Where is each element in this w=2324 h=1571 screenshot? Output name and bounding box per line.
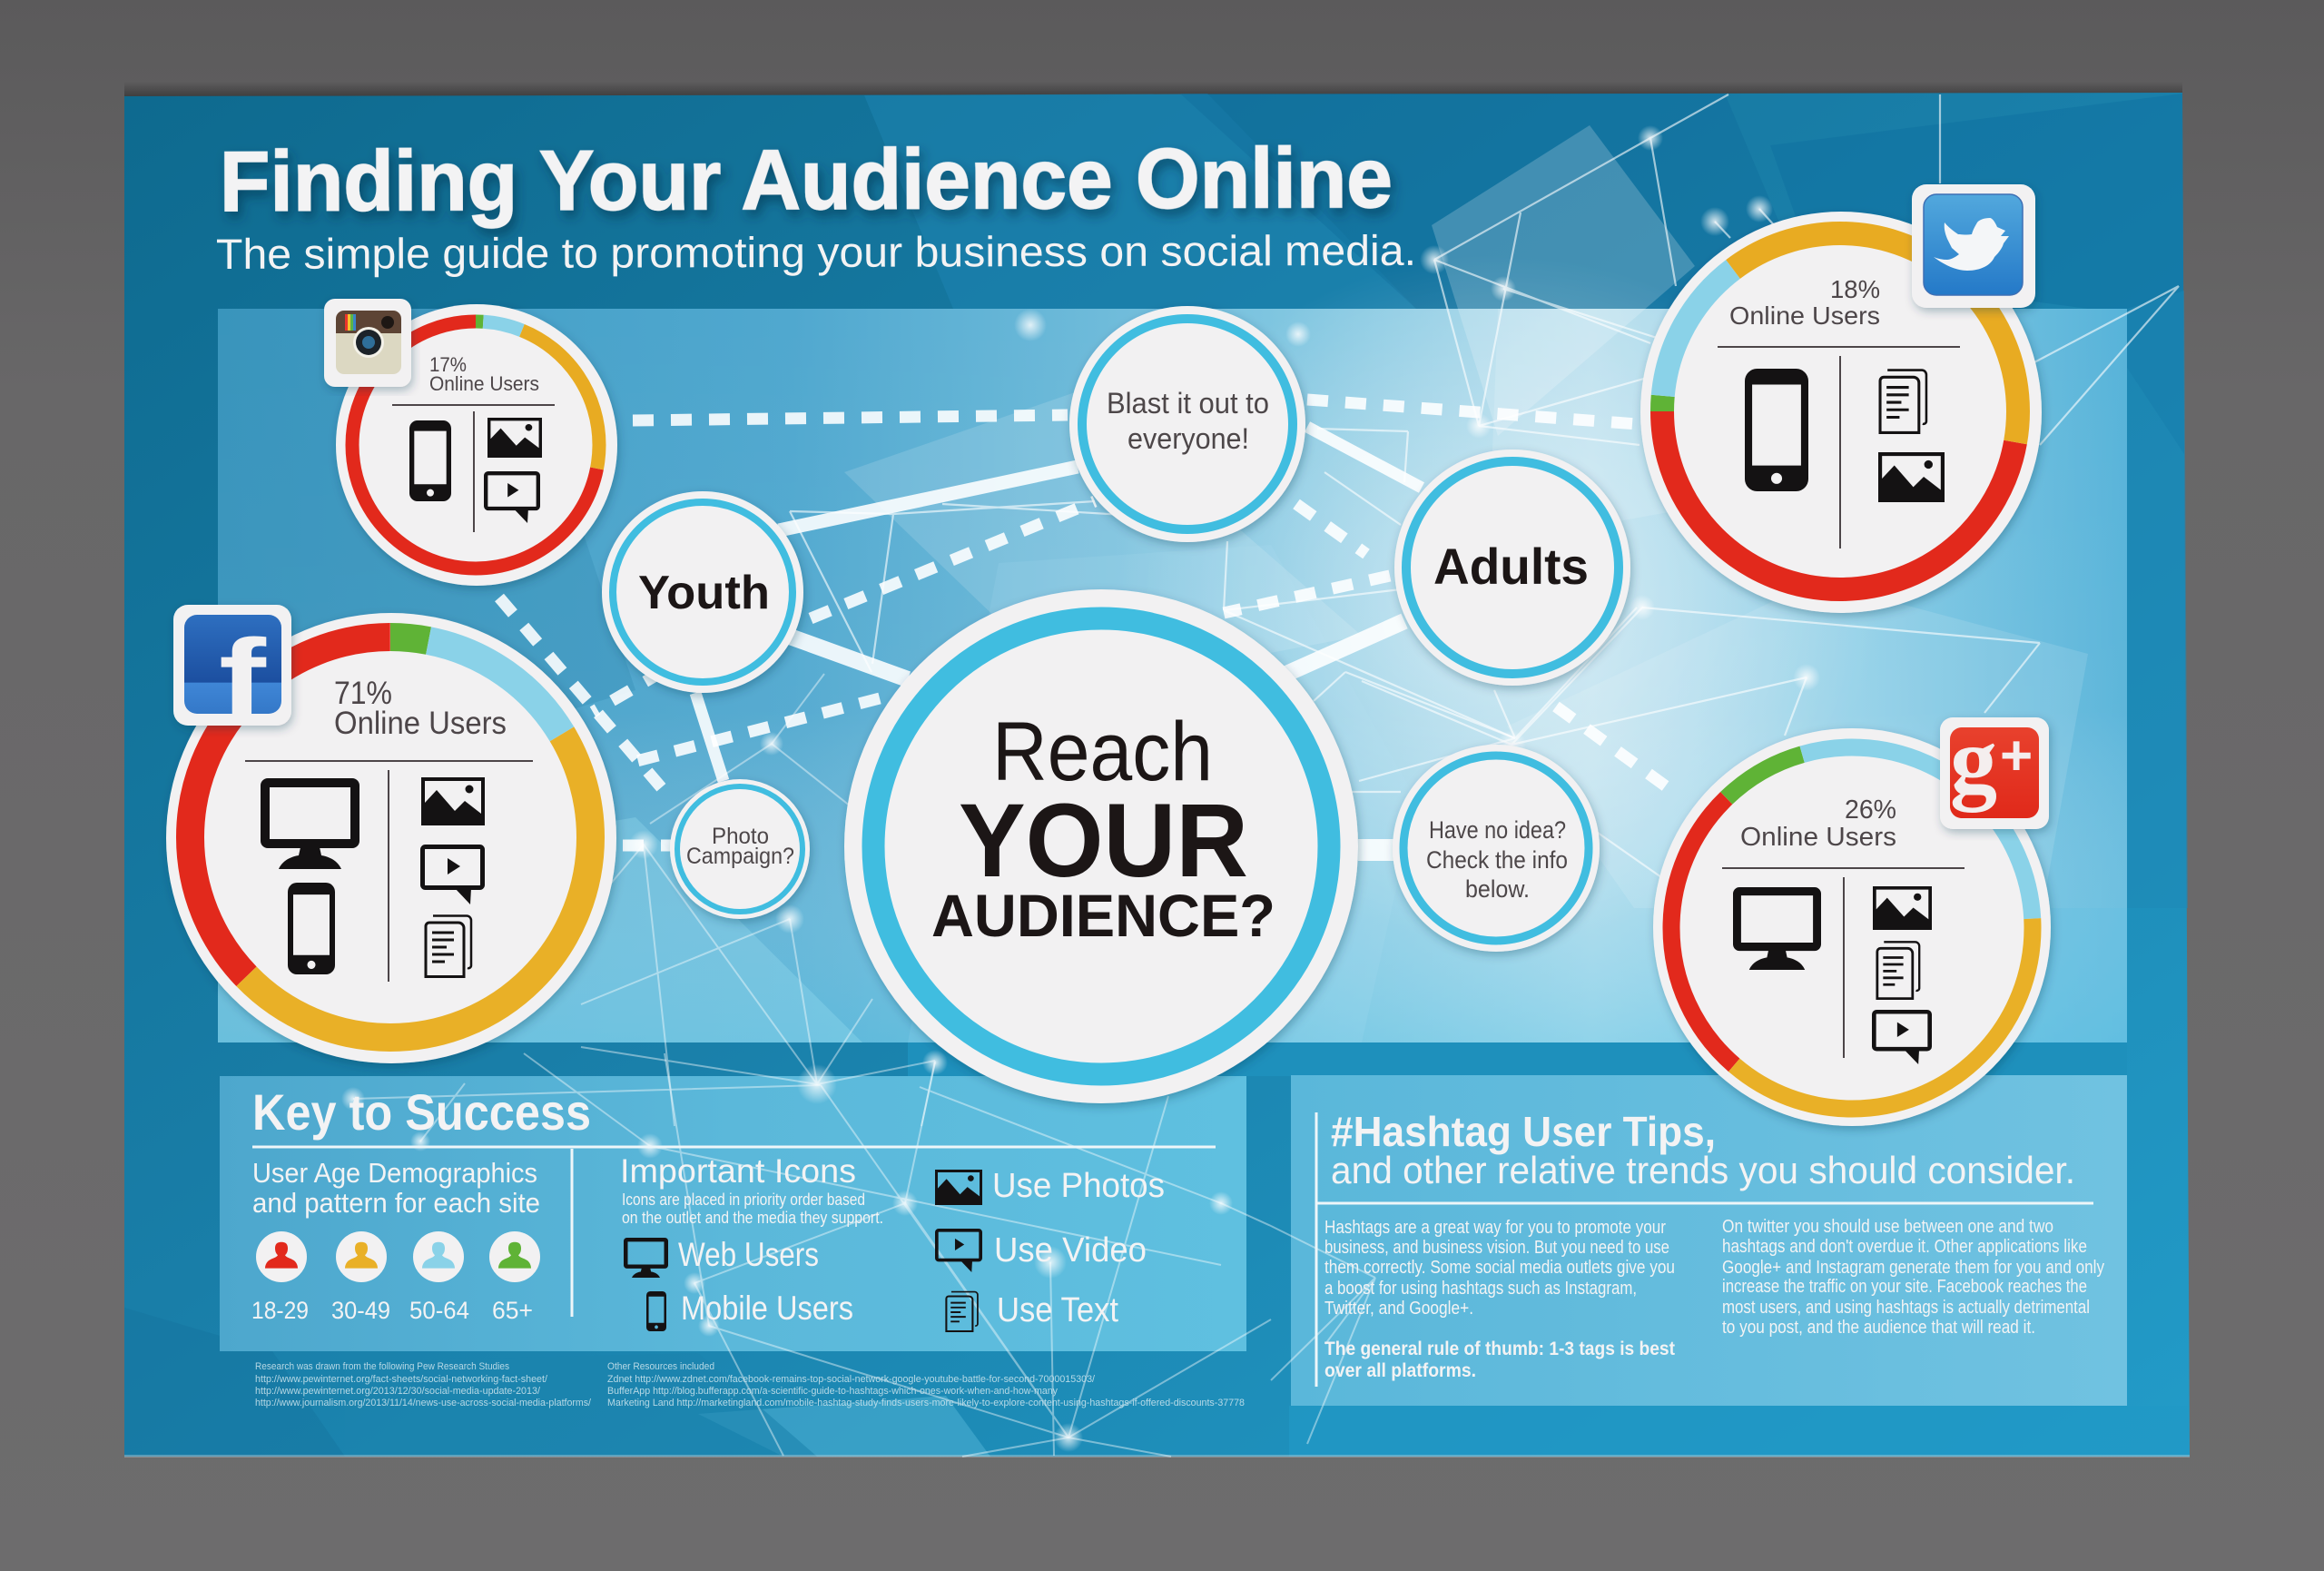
legend: age labels: 30-49 xyxy=(331,1297,390,1324)
icon: photos xyxy=(1878,452,1945,502)
facebook stat: Online Users xyxy=(334,706,507,741)
badge: Twitter xyxy=(1912,184,2035,308)
callout: rule of thumb: over all platforms. xyxy=(1324,1360,1476,1381)
text: right column: hashtags and don't overdue it. Other applications like xyxy=(1722,1237,2087,1257)
icon: photos xyxy=(1873,886,1932,930)
network mesh lines: upper xyxy=(790,94,2179,890)
key: use photos: Use Photos xyxy=(992,1167,1165,1205)
text: research sources: Other Resources included xyxy=(607,1361,714,1372)
text: right column: On twitter you should use between one and two xyxy=(1722,1217,2053,1237)
icon: video xyxy=(486,473,538,523)
bubble: Blast it out to everyone: Blast it out to xyxy=(1107,387,1269,420)
bubble: Photo Campaign: Photo xyxy=(712,824,769,849)
callout: rule of thumb xyxy=(1324,1339,1675,1381)
instagram age ring xyxy=(352,321,599,568)
bubble: Have no idea: Have no idea? xyxy=(1429,816,1566,844)
icon: video xyxy=(1874,1012,1930,1064)
twitter stat: 18% xyxy=(1830,275,1880,303)
icon: text xyxy=(1880,371,1926,432)
bubble: Have no idea xyxy=(1393,745,1600,952)
title: Finding Your Audience Online xyxy=(220,130,1393,229)
icon: web xyxy=(1737,892,1817,970)
text: research sources: BufferApp http://blog.bufferapp.com/a-scientific-guide-to-hashtags-which-ones-work-when-and-how-many xyxy=(607,1386,1058,1397)
icon: text xyxy=(426,915,471,977)
badge: Facebook: f xyxy=(219,618,267,737)
age demographics text xyxy=(252,1157,540,1219)
key: mobile users: Mobile Users xyxy=(681,1289,853,1327)
text: research sources: http://www.pewinternet.org/2013/12/30/social-media-update-2013/ xyxy=(255,1386,541,1397)
bubble: Photo Campaign xyxy=(670,779,810,919)
panel: Instagram usage circle xyxy=(324,299,617,586)
text: icon note xyxy=(622,1191,883,1227)
legend: age labels xyxy=(251,1297,533,1324)
text: right column: to you post, and the audience that will read it. xyxy=(1722,1318,2035,1338)
panel: Google+ usage circle xyxy=(1653,708,2051,1126)
badge: Facebook xyxy=(173,605,291,737)
google plus age ring xyxy=(1671,747,2033,1109)
facebook age ring xyxy=(191,637,590,1037)
bubble: Reach your audience: YOUR xyxy=(959,783,1248,899)
bubble: Youth: Youth xyxy=(638,567,770,619)
text: right column: increase the traffic on your site. Facebook reaches the xyxy=(1722,1277,2087,1297)
text: research sources: http://www.journalism.org/2013/11/14/news-use-across-social-media-platforms/ xyxy=(255,1398,592,1408)
icon: photos xyxy=(487,418,542,458)
twitter stat xyxy=(1729,275,1880,330)
panel: hashtag tips box fill xyxy=(1291,1075,2127,1406)
bubble: Youth xyxy=(602,491,803,693)
poster sheet xyxy=(124,93,2190,1457)
panel: Facebook usage circle xyxy=(166,605,616,1063)
text: left column: Twitter, and Google+. xyxy=(1324,1299,1473,1319)
legend: age group markers xyxy=(256,1231,540,1282)
instagram stat xyxy=(429,353,539,395)
badge: Google+: + xyxy=(2000,725,2033,787)
text: left column xyxy=(1324,1218,1675,1319)
text: research sources: Research was drawn from the following Pew Research Studies xyxy=(255,1361,509,1372)
text: right column xyxy=(1722,1217,2104,1338)
google plus stat: 26% xyxy=(1845,795,1896,825)
panel: key to success content xyxy=(251,1083,1216,1331)
text: research sources xyxy=(255,1361,1245,1408)
bubble: Have no idea: Check the info xyxy=(1426,846,1568,874)
badge: Instagram xyxy=(324,299,411,387)
bubble: Blast it out to everyone xyxy=(1069,306,1305,542)
legend: age labels: 18-29 xyxy=(251,1297,309,1324)
badge: Google+: g xyxy=(1950,708,1997,813)
subheading: and other relative trends you should consider. xyxy=(1331,1149,2075,1191)
text: right column: Google+ and Instagram generate them for you and only xyxy=(1722,1258,2104,1278)
icon: mobile xyxy=(409,420,451,501)
text: research sources: Zdnet http://www.zdnet.com/facebook-remains-top-social-network-google-youtube-battle-for-second-7000015303/ xyxy=(607,1374,1096,1385)
instagram stat: Online Users xyxy=(429,372,539,395)
google plus stat: Online Users xyxy=(1740,823,1896,852)
key: web users xyxy=(625,1236,819,1278)
google plus stat xyxy=(1740,795,1896,852)
facebook stat xyxy=(334,676,507,741)
bubble: Reach your audience: Reach xyxy=(992,706,1213,798)
icon: mobile xyxy=(1745,369,1808,491)
text: right column: most users, and using hashtags is actually detrimental xyxy=(1722,1298,2090,1318)
text: left column: business, and business vision. But you need to use xyxy=(1324,1238,1669,1258)
icon: photos xyxy=(421,777,485,825)
icon: mobile xyxy=(288,883,335,974)
icon: text xyxy=(1877,942,1919,999)
icon: video xyxy=(423,846,483,904)
icon: web xyxy=(265,783,355,869)
bubble: Adults: Adults xyxy=(1433,538,1589,595)
bubble: Reach your audience xyxy=(844,589,1358,1103)
text: research sources: http://www.pewinternet.org/fact-sheets/social-networking-fact-sheet/ xyxy=(255,1374,548,1385)
key: use text xyxy=(946,1291,1118,1331)
twitter age ring xyxy=(1662,233,2018,589)
badge: Google+ xyxy=(1940,708,2049,829)
text: icon note: Icons are placed in priority order based xyxy=(622,1191,865,1209)
heading: important icons: Important Icons xyxy=(620,1152,856,1190)
panel: Twitter usage circle xyxy=(1640,184,2042,613)
key: use video xyxy=(937,1230,1147,1272)
panel: main network backdrop xyxy=(218,125,2127,1076)
callout: rule of thumb: The general rule of thumb: 1-3 tags is best xyxy=(1324,1339,1675,1359)
text: left column: a boost for using hashtags such as Instagram, xyxy=(1324,1279,1637,1299)
age demographics text: User Age Demographics xyxy=(252,1157,537,1189)
network mesh lines: lower xyxy=(353,674,1375,1457)
connectors: solid lines between bubbles xyxy=(695,427,1422,850)
bubble: Photo Campaign: Campaign? xyxy=(686,844,794,869)
connectors: dashed lines xyxy=(499,400,1679,845)
twitter stat: Online Users xyxy=(1729,301,1880,330)
subtitle: The simple guide to promoting your business on social media. xyxy=(216,226,1416,278)
key: use text: Use Text xyxy=(997,1291,1118,1329)
bubble: Reach your audience: AUDIENCE? xyxy=(931,882,1275,949)
text: research sources: Marketing Land http://marketingland.com/mobile-hashtag-study-finds-users-more-likely-to-explore-content-using-hashtags-if-offered-discounts-37778 xyxy=(607,1398,1245,1408)
network glow nodes xyxy=(341,125,1820,1452)
text: left column: them correctly. Some social media outlets give you xyxy=(1324,1258,1675,1278)
instagram stat: 17% xyxy=(429,353,467,376)
text: left column: Hashtags are a great way for you to promote your xyxy=(1324,1218,1666,1238)
bubble: Have no idea: below. xyxy=(1465,875,1530,903)
legend: age labels: 50-64 xyxy=(409,1297,469,1324)
age demographics text: and pattern for each site xyxy=(252,1187,540,1219)
key: use video: Use Video xyxy=(994,1231,1147,1270)
heading: hashtag user tips: #Hashtag User Tips, xyxy=(1331,1108,1716,1155)
key: mobile users xyxy=(646,1289,853,1331)
legend: age labels: 65+ xyxy=(492,1297,533,1324)
heading: key to success: Key to Success xyxy=(252,1083,591,1141)
bubble: Adults xyxy=(1394,450,1630,686)
facebook stat: 71% xyxy=(334,676,392,711)
panel: hashtag tips content xyxy=(1316,1108,2104,1387)
text: icon note: on the outlet and the media they support. xyxy=(622,1209,883,1227)
panel: key to success box fill xyxy=(220,1076,1246,1351)
bubble: Blast it out to everyone: everyone! xyxy=(1128,422,1249,455)
key: web users: Web Users xyxy=(678,1236,819,1273)
